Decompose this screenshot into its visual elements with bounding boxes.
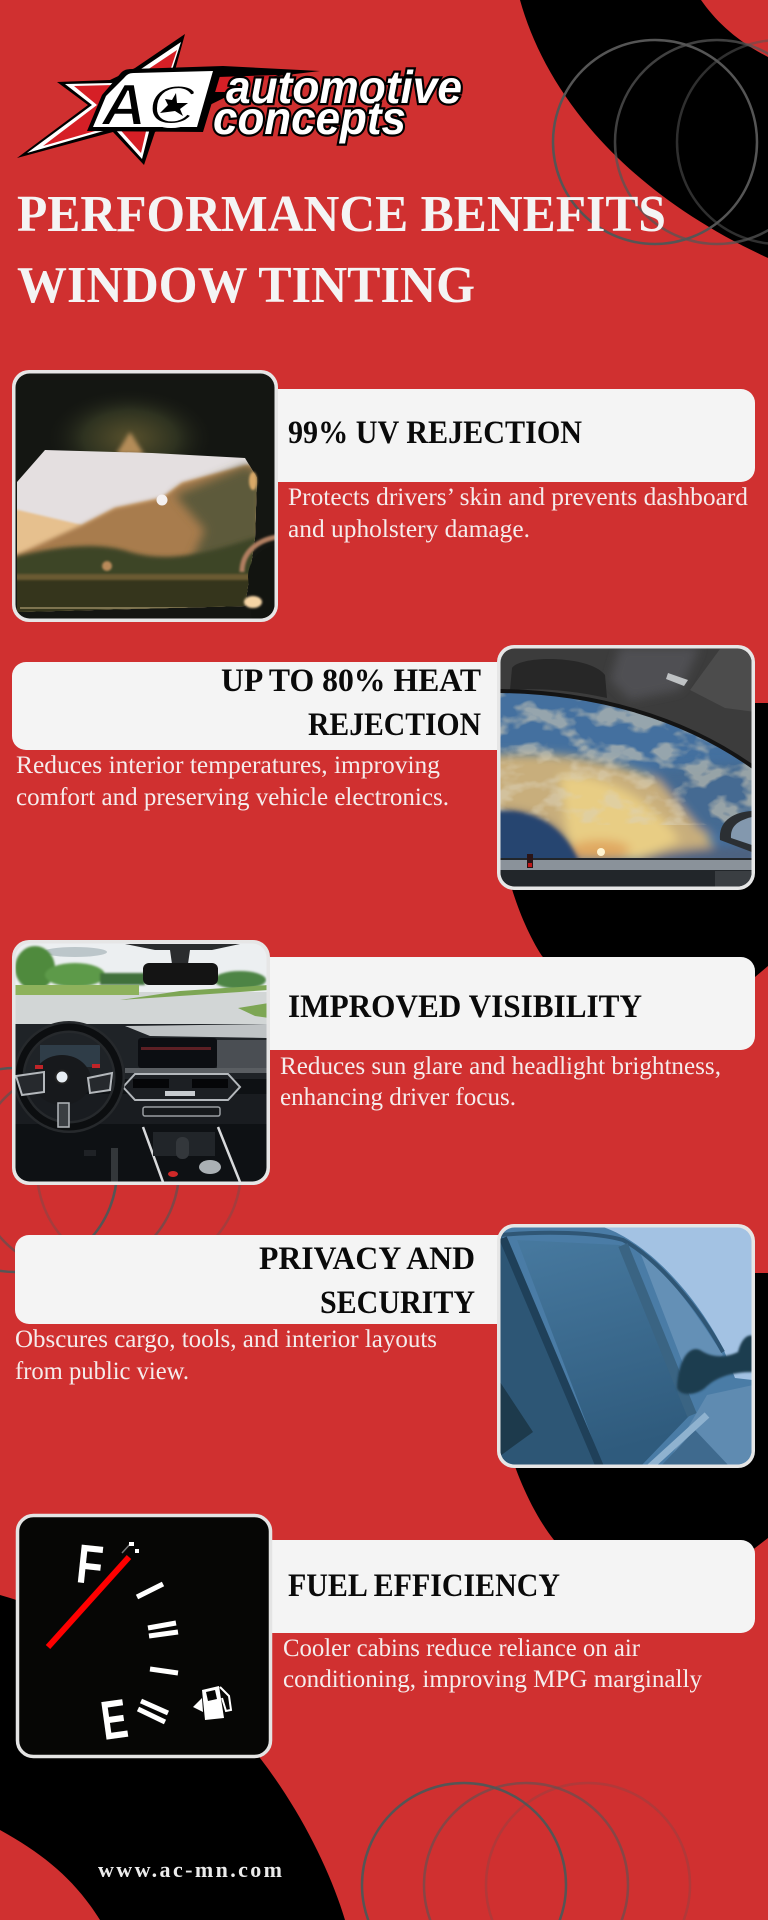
- icon: fuel gauge: F: [74, 1532, 106, 1597]
- panel: up to 80% heat rejection: [12, 645, 760, 890]
- description: Reduces sun glare and headlight brightness,: [280, 1053, 721, 1080]
- description: Protects drivers’ skin and prevents dashboard: [288, 484, 748, 511]
- title: PERFORMANCE BENEFITS: [17, 186, 666, 243]
- panel: privacy and security: [15, 1224, 755, 1468]
- heading card: FUEL EFFICIENCY: [288, 1568, 560, 1604]
- heading card: IMPROVED VISIBILITY: [288, 989, 642, 1025]
- description: [283, 1635, 703, 1693]
- heading card: 99% UV REJECTION: [288, 415, 582, 451]
- description: [288, 484, 748, 543]
- description: enhancing driver focus.: [280, 1084, 516, 1111]
- panel: improved visibility: [12, 940, 755, 1185]
- photo: tinted car window: [497, 1224, 755, 1468]
- icon: fuel gauge: [18, 1516, 270, 1756]
- heading card: [15, 1235, 505, 1324]
- logo AC badge: [87, 66, 223, 138]
- description: [16, 752, 449, 811]
- logo AC badge: C: [146, 73, 199, 138]
- logo word: concepts: concepts: [213, 92, 406, 144]
- photo: car dashboard: [12, 940, 270, 1185]
- logo: Automotive Concepts: [17, 34, 462, 165]
- panel: 99% UV rejection: [10, 370, 755, 622]
- black shape: top right: [520, 0, 768, 258]
- photo: sunset through car window: [10, 370, 278, 622]
- heading card: [262, 957, 755, 1050]
- logo AC badge: A: [100, 73, 146, 138]
- heading card: [264, 1540, 755, 1633]
- icon: fuel gauge: E: [97, 1687, 131, 1752]
- description: Obscures cargo, tools, and interior layouts: [15, 1326, 437, 1353]
- title: WINDOW TINTING: [17, 257, 475, 314]
- title: [17, 186, 666, 314]
- heading card: REJECTION: [308, 707, 481, 743]
- description: Reduces interior temperatures, improving: [16, 752, 441, 779]
- footer url: www.ac-mn.com: [98, 1857, 282, 1882]
- heading card: PRIVACY AND: [259, 1241, 475, 1277]
- description: [15, 1326, 437, 1385]
- description: Cooler cabins reduce reliance on air: [283, 1635, 641, 1662]
- logo star: [17, 34, 320, 165]
- heading card: [270, 389, 755, 482]
- heading card: UP TO 80% HEAT: [221, 663, 481, 699]
- panel: fuel efficiency: [18, 1516, 755, 1756]
- heading card: [12, 662, 505, 750]
- ring decoration: middle left: [0, 1068, 241, 1272]
- ring decoration: top right: [553, 40, 768, 244]
- black shape: middle right: [500, 703, 768, 1006]
- logo word: automotive: automotive: [226, 61, 462, 113]
- description: [280, 1053, 721, 1111]
- description: from public view.: [15, 1358, 189, 1385]
- description: conditioning, improving MPG marginally: [283, 1666, 703, 1693]
- black shape: lower right: [500, 1273, 768, 1581]
- black shape: bottom left: [0, 1595, 345, 1920]
- photo: sky through car side window: [490, 645, 760, 890]
- heading card: SECURITY: [320, 1285, 475, 1321]
- description: comfort and preserving vehicle electronics.: [16, 784, 449, 811]
- ring decoration: bottom: [362, 1783, 690, 1920]
- description: and upholstery damage.: [288, 516, 530, 543]
